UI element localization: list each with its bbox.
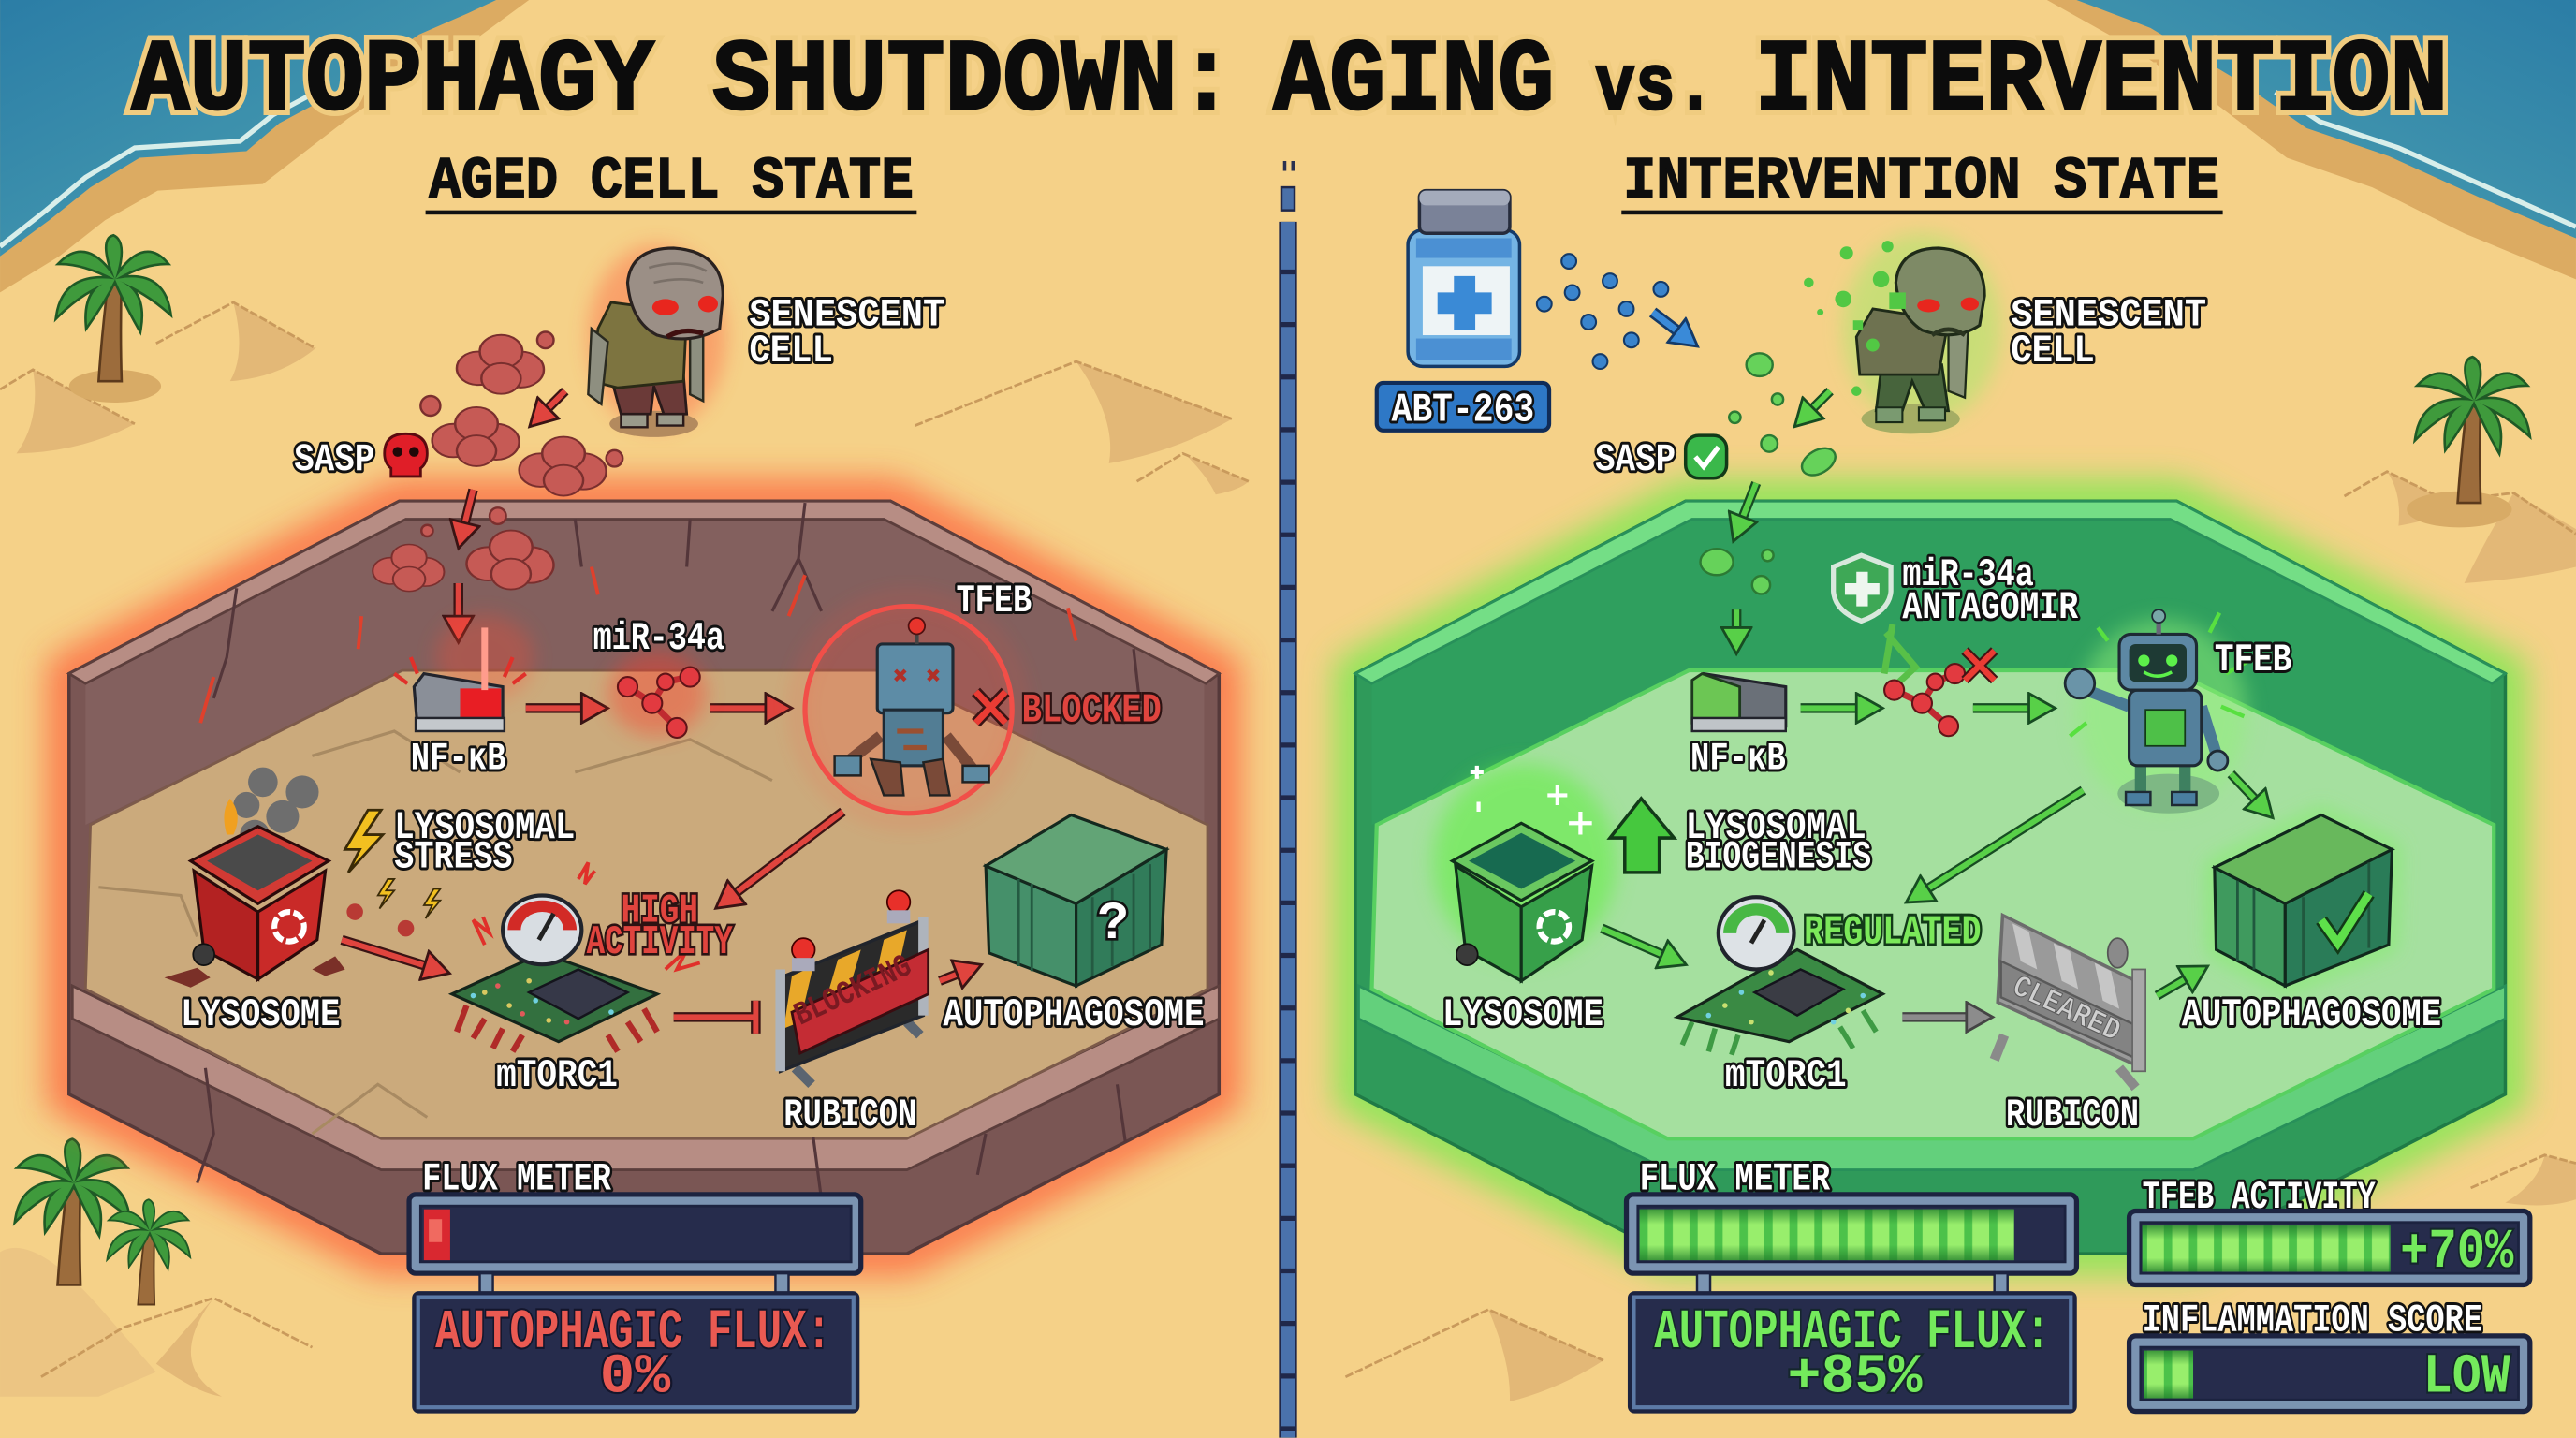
arrow: miR-34a to TFEB (intervention) (1973, 705, 2042, 711)
icon: blocked TFEB robot in bubble (797, 598, 1020, 822)
arrow: NF-kB to miR-34a (intervention) (1801, 705, 1869, 711)
wall and floor cracks (98, 503, 1150, 1199)
icon: mTORC1 regulated chip: mTORC1 (1725, 1053, 1847, 1098)
icon: Rubicon blocking barrier (781, 890, 929, 1137)
icon: NF-kB switch off (1690, 674, 1786, 781)
inflammation score meter (2130, 1299, 2530, 1412)
icon: Rubicon cleared barrier: CLEARED (2007, 970, 2126, 1050)
icon: Rubicon blocking barrier: BLOCKING (789, 947, 917, 1034)
label: lysosomal stress (345, 805, 575, 880)
icon: cleared autophagosome container (2215, 814, 2392, 986)
arrow: zombie to SASP (539, 391, 565, 418)
readout panel: autophagic flux 0%: AUTOPHAGIC FLUX: (435, 1300, 831, 1364)
icon: Rubicon blocking barrier: RUBICON (783, 1093, 916, 1137)
label: senescent cell (aged): SENESCENT (749, 292, 944, 337)
icon: antagomir shield: ANTAGOMIR (1902, 585, 2079, 630)
arrow: zombie to SASP (cleared) (1804, 391, 1830, 418)
badge: ABT-263: ABT-263 (1392, 387, 1534, 433)
icon: Rubicon cleared barrier (1995, 916, 2145, 1137)
arrow: lysosome to mTORC1 (intervention) (1602, 929, 1674, 960)
inhibition arrow: mTORC1 to Rubicon (674, 1001, 755, 1034)
connector posts (aged) (480, 1273, 788, 1295)
TFEB activity meter: TFEB ACTIVITY (2143, 1175, 2376, 1220)
label: lysosome (aged): LYSOSOME (181, 992, 340, 1037)
label: autophagosome (aged): AUTOPHAGOSOME (943, 992, 1204, 1037)
TFEB activity meter: +70% (2400, 1220, 2513, 1284)
icon: unknown autophagosome container (986, 814, 1166, 986)
label: lysosomal biogenesis: BIOGENESIS (1686, 835, 1871, 880)
arrow: TFEB to mTORC1 (726, 812, 842, 901)
arrow: NF-kB to miR-34a (526, 705, 594, 711)
title: INTERVENTION (1754, 23, 2448, 139)
flux meter (intervention) (1627, 1157, 2076, 1273)
label: SASP skull (294, 433, 427, 482)
label: senescent cell (intervention): SENESCENT (2011, 292, 2206, 337)
label: senescent cell (intervention) (2011, 292, 2206, 374)
arrow: miR-34a to TFEB (710, 705, 779, 711)
icon: mTORC1 overactive chip: mTORC1 (496, 1053, 618, 1098)
panel: intervention arena (1355, 501, 2505, 1254)
arrow: mTORC1 to Rubicon (grey) (1902, 1014, 1980, 1020)
label: blocked: BLOCKED (1022, 687, 1162, 734)
arrow: SASP to NF-kB (cleared) (1734, 609, 1739, 640)
icon: damaged lysosome bin (165, 768, 345, 988)
title (131, 23, 2448, 139)
palm tree: small lower left (109, 1200, 189, 1304)
SASP clouds (aged) (373, 332, 622, 592)
TFEB activity meter (2130, 1175, 2530, 1284)
arrow: SASP to NF-kB (456, 583, 461, 629)
label: blocked (976, 687, 1162, 734)
icon: senescent zombie (aged) (588, 244, 726, 437)
title: AGING (1273, 23, 1554, 139)
label: SASP skull: SASP (294, 437, 374, 482)
heading: intervention state: INTERVENTION STATE (1623, 148, 2219, 215)
arrow: SASP into arena (461, 490, 474, 536)
icon: antagomir shield: miR-34a (1902, 552, 2034, 597)
label: TFEB (intervention): TFEB (2215, 638, 2291, 682)
title: AUTOPHAGY SHUTDOWN: (131, 23, 1236, 139)
icon: antagomir shield (1834, 552, 2079, 630)
label: senescent cell (intervention): CELL (2011, 329, 2095, 374)
icon: NF-kB switch off: NF-κB (1690, 736, 1786, 781)
icon: active TFEB robot (2065, 609, 2249, 814)
stress sparks (346, 879, 440, 936)
arrow: lysosome to mTORC1 (342, 940, 437, 969)
label: lysosomal biogenesis (1610, 799, 1871, 880)
drug particles (1537, 254, 1668, 369)
ocean: top-right shore (2047, 0, 2576, 279)
label: SASP check: SASP (1595, 437, 1676, 482)
label: TFEB (aged): TFEB (956, 579, 1032, 624)
icon: ABT-263 bottle (1408, 191, 1519, 366)
flux meter (intervention): FLUX METER (1640, 1157, 1831, 1202)
title: AGING (1273, 23, 1554, 139)
palm tree: right (2407, 359, 2528, 527)
readout panel: autophagic flux 0%: 0% (600, 1345, 670, 1409)
arrow: TFEB to autophagosome (2231, 774, 2263, 808)
label: high activity: ACTIVITY (587, 919, 733, 966)
icon: mTORC1 overactive chip (452, 862, 700, 1098)
inflammation score meter: LOW (2423, 1345, 2510, 1409)
arrow: TFEB to mTORC1 (intervention) (1917, 790, 2083, 895)
icon: miR-34a molecule (593, 616, 724, 738)
label: SASP check (1595, 435, 1727, 482)
label: lysosomal biogenesis: LYSOSOMAL (1686, 805, 1866, 850)
title: AUTOPHAGY SHUTDOWN: (131, 23, 1236, 139)
icon: miR-34a molecule: miR-34a (593, 616, 724, 661)
arrow: Rubicon to autophagosome (intervention) (2157, 973, 2197, 996)
label: senescent cell (aged): CELL (749, 329, 833, 374)
icon: blocked miR-34a molecule (1884, 624, 1995, 736)
center divider (1281, 161, 1295, 1438)
sand dunes (0, 302, 2576, 1401)
icon: dissolving zombie (1804, 233, 2001, 433)
label: high activity (587, 888, 733, 966)
readout panel: autophagic flux +85% (1630, 1293, 2075, 1412)
readout panel: autophagic flux +85%: +85% (1788, 1345, 1923, 1409)
palm tree: upper left (57, 237, 169, 403)
inflammation score meter: INFLAMMATION SCORE (2143, 1299, 2482, 1343)
heading: aged cell state: AGED CELL STATE (429, 148, 914, 215)
flux meter (aged): FLUX METER (422, 1157, 612, 1202)
label: lysosomal stress: LYSOSOMAL (394, 805, 575, 850)
label: lysosome (intervention): LYSOSOME (1442, 992, 1603, 1037)
icon: healthy lysosome bin (1432, 764, 1617, 981)
arrow: SASP into intervention arena (1738, 483, 1756, 529)
label: autophagosome (intervention): AUTOPHAGOSOME (2182, 992, 2441, 1037)
label: lysosomal stress: STRESS (394, 835, 513, 880)
readout panel: autophagic flux 0% (414, 1293, 857, 1412)
label: high activity: HIGH (621, 888, 698, 935)
readout panel: autophagic flux +85%: AUTOPHAGIC FLUX: (1654, 1300, 2050, 1364)
icon: Rubicon cleared barrier: RUBICON (2006, 1093, 2139, 1137)
connector posts (intervention) (1697, 1273, 2008, 1295)
palm tree: lower left (17, 1140, 128, 1284)
icon: mTORC1 regulated chip (1677, 897, 1882, 1098)
ocean: top-left shore (0, 0, 529, 292)
label: regulated: REGULATED (1804, 909, 1982, 956)
title: vs. (1595, 44, 1715, 133)
cleared SASP particles (1701, 353, 1840, 594)
icon: NF-kB switch on: NF-κB (411, 736, 506, 781)
title: vs. (1595, 44, 1715, 133)
arrow: Rubicon to autophagosome (940, 969, 970, 981)
label: senescent cell (aged) (749, 292, 944, 374)
icon: NF-kB switch on (394, 614, 534, 781)
arrow: drug to zombie (1653, 312, 1687, 339)
flux meter (aged) (409, 1157, 861, 1273)
title: INTERVENTION (1754, 23, 2448, 139)
panel: aged arena (69, 501, 1219, 1254)
icon: unknown autophagosome container: ? (1097, 894, 1129, 954)
